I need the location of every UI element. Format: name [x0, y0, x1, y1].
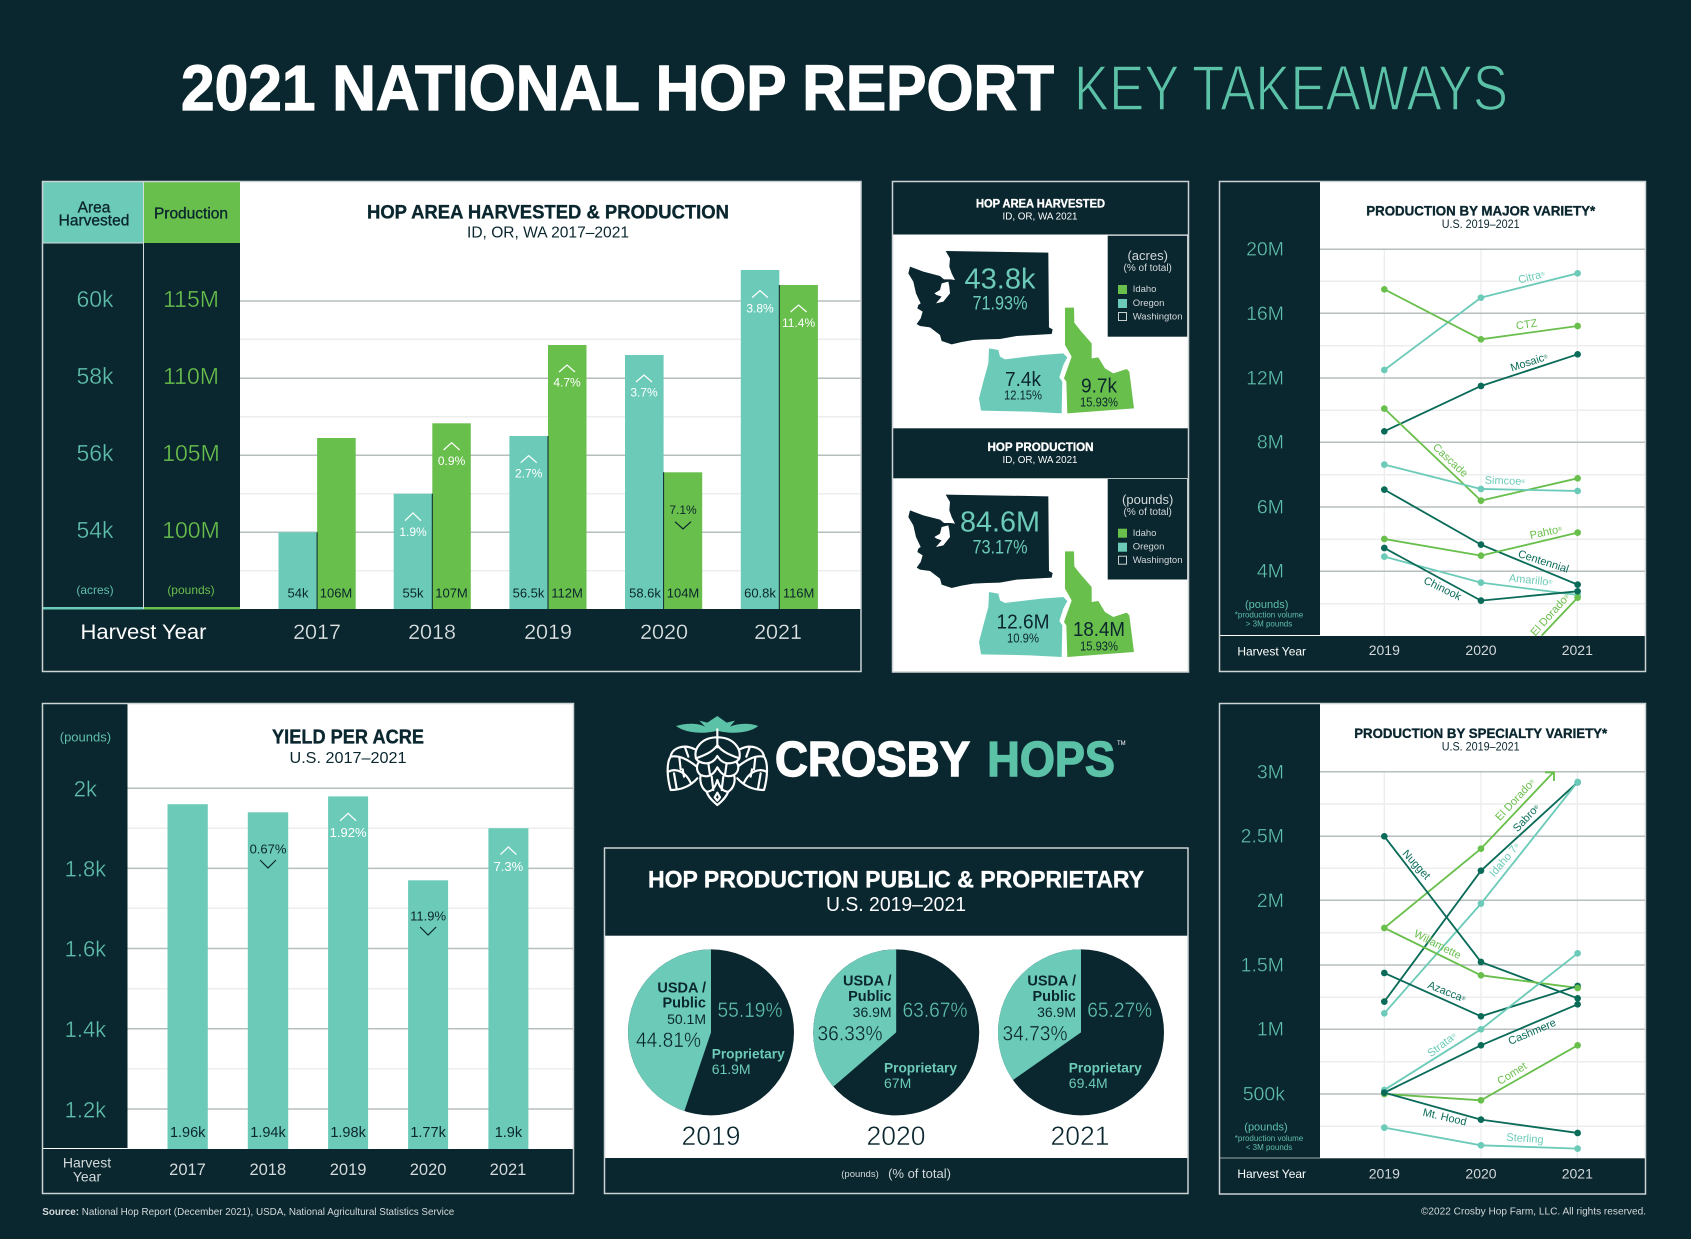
x axis	[1237, 1165, 1593, 1181]
acres axis: (acres)	[76, 583, 114, 597]
legend: acres: (acres)	[1127, 248, 1168, 263]
bar chart: yield: 1.92%	[330, 825, 367, 840]
bar chart: yield	[168, 796, 528, 1149]
values: pounds: 84.6M	[960, 507, 1040, 539]
x axis: 2019	[1369, 1165, 1400, 1181]
x axis: 2019	[330, 1161, 366, 1179]
bar chart: area and production: 54k	[288, 586, 309, 600]
y axis: 1.5M	[1241, 954, 1284, 976]
bar chart: area and production	[278, 270, 818, 609]
heading: hop production: HOP PRODUCTION	[988, 440, 1094, 454]
y axis	[1235, 761, 1304, 1152]
acres axis: 58k	[76, 363, 114, 389]
y axis: > 3M pounds	[1246, 620, 1292, 628]
bar chart: yield: 1.98k	[330, 1125, 367, 1141]
bar chart: yield: 11.9%	[410, 908, 446, 923]
x axis: harvest years: 2020	[640, 620, 688, 644]
pie: 2021: Proprietary	[1069, 1060, 1142, 1076]
line chart: major varieties: Chinook	[1422, 575, 1464, 603]
map: Oregon pounds	[979, 592, 1067, 657]
bar chart: yield: 0.67%	[250, 841, 287, 856]
values: pounds: 18.4M	[1073, 619, 1125, 641]
legend: pounds: Washington	[1133, 555, 1183, 566]
values: pounds: 10.9%	[1007, 630, 1039, 646]
heading: hop area harvested	[976, 197, 1105, 223]
acres axis: 56k	[76, 440, 114, 466]
x axis: Harvest	[63, 1154, 111, 1170]
bar chart: yield: 1.94k	[250, 1125, 286, 1141]
y axis: 1.6k	[65, 936, 107, 962]
title: 2021 NATIONAL HOP REPORT	[181, 52, 1054, 124]
pie: 2019: Proprietary	[712, 1045, 785, 1061]
column header: area harvested: Harvested	[59, 212, 129, 230]
y axis	[60, 730, 111, 1122]
panel: production by major variety	[1220, 181, 1646, 672]
y axis: 6M	[1257, 496, 1284, 518]
pounds axis: 115M	[163, 286, 219, 312]
pie: 2019	[628, 949, 794, 1151]
pie: 2021: 2021	[1051, 1121, 1109, 1151]
values: pounds: 12.6M	[996, 612, 1050, 634]
heading	[272, 727, 424, 767]
title	[181, 52, 1508, 124]
line chart: specialty varieties: Sterling	[1506, 1132, 1544, 1146]
values: acres: 71.93%	[972, 294, 1028, 314]
values: acres: 43.8k	[964, 263, 1036, 295]
bar chart: area and production: 112M	[551, 586, 583, 600]
bar chart: area and production: 60.8k	[744, 586, 776, 600]
line chart: specialty varieties: Comet	[1495, 1060, 1529, 1088]
heading: U.S. 2019–2021	[1442, 741, 1520, 753]
column header: area harvested: Area	[78, 200, 111, 216]
map: Washington pounds	[908, 495, 1053, 588]
bar chart: area and production: 3.8%	[746, 302, 774, 316]
pie: 2019: USDA /	[657, 980, 706, 996]
column header: production: Production	[154, 206, 228, 222]
legend: acres: Washington	[1133, 312, 1183, 322]
x axis: harvest years: 2017	[293, 620, 341, 644]
copyright note: ©2022 Crosby Hop Farm, LLC. All rights reserved.	[1421, 1206, 1646, 1218]
line chart: specialty varieties: Cashmere	[1507, 1017, 1558, 1048]
panel: production by specialty variety	[1220, 704, 1646, 1194]
logo: Crosby Hops	[668, 716, 1126, 805]
pie: 2020: 36.33%	[818, 1022, 882, 1046]
source note: Source: National Hop Report (December 2021), USDA, National Agricultural Statistics Service	[42, 1206, 454, 1218]
legend: acres: Oregon	[1133, 298, 1164, 309]
bar chart: yield: 1.96k	[170, 1125, 206, 1141]
values: acres: 15.93%	[1080, 394, 1118, 410]
bar chart: area and production: 4.7%	[553, 376, 581, 390]
x axis: harvest years	[80, 620, 802, 644]
pie: 2020: Proprietary	[884, 1060, 957, 1076]
bar chart: area and production: 116M	[783, 586, 814, 600]
line chart: specialty varieties: Strata®	[1425, 1030, 1459, 1060]
heading: PRODUCTION BY MAJOR VARIETY*	[1366, 203, 1596, 219]
y axis: 1.2k	[65, 1098, 107, 1122]
heading	[1366, 203, 1596, 231]
pie: 2021: USDA /	[1027, 973, 1076, 989]
values: pounds	[960, 507, 1125, 654]
heading: hop production	[988, 440, 1094, 466]
pie: 2019: 2019	[682, 1121, 740, 1151]
pie: 2020: 63.67%	[902, 999, 968, 1022]
logo: Crosby Hops: TM	[1117, 741, 1126, 747]
y axis: *production volume	[1235, 610, 1304, 620]
legend: pounds: Idaho	[1133, 528, 1156, 539]
line chart: major varieties: El Dorado®	[1529, 591, 1573, 639]
icon: hop cone	[668, 716, 767, 805]
panel: yield per acre	[42, 704, 574, 1194]
acres axis	[76, 286, 114, 597]
map: Idaho pounds	[1064, 551, 1134, 657]
line chart: specialty varieties: El Dorado®	[1493, 777, 1538, 823]
bar chart: area and production: 11.4%	[782, 316, 815, 330]
y axis: 16M	[1246, 303, 1284, 325]
panel: hop area harvested and production	[42, 181, 861, 672]
pie footer units: (pounds)	[841, 1169, 879, 1180]
line chart: major varieties: Amarillo®	[1508, 572, 1553, 589]
pie: 2021: 34.73%	[1002, 1022, 1068, 1046]
pie: 2019: Public	[662, 996, 706, 1012]
y axis: < 3M pounds	[1246, 1143, 1292, 1152]
heading: U.S. 2019–2021	[1442, 219, 1520, 231]
values: pounds: 15.93%	[1080, 638, 1118, 654]
x axis: harvest years: 2021	[754, 620, 802, 644]
heading: U.S. 2017–2021	[290, 750, 407, 767]
y axis	[1235, 238, 1304, 629]
legend: acres: (% of total)	[1124, 263, 1172, 274]
pie: 2020: 36.9M	[853, 1004, 892, 1020]
x axis: harvest years: 2019	[524, 620, 572, 644]
map: Idaho acres	[1064, 308, 1134, 413]
line chart: specialty varieties	[1381, 772, 1581, 1152]
pie: 2021: 65.27%	[1087, 999, 1152, 1022]
heading: YIELD PER ACRE	[272, 727, 424, 749]
pie: 2020	[813, 949, 979, 1151]
line chart: specialty varieties: Azacca®	[1426, 979, 1467, 1005]
legend: acres: Idaho	[1133, 284, 1156, 295]
heading: hop area harvested: HOP AREA HARVESTED	[976, 197, 1105, 211]
bar chart: yield: 1.9k	[495, 1125, 523, 1141]
y axis: (pounds)	[60, 730, 111, 744]
bar chart: area and production: 56.5k	[513, 586, 545, 600]
pie footer units	[841, 1166, 951, 1181]
pie: 2021: 36.9M	[1037, 1004, 1076, 1020]
line chart: specialty varieties: Idaho 7®	[1487, 841, 1523, 879]
heading: hop production: ID, OR, WA 2021	[1002, 454, 1078, 466]
heading: hop area harvested: ID, OR, WA 2021	[1002, 211, 1078, 223]
acres axis: 54k	[76, 517, 114, 543]
pounds axis: 105M	[162, 440, 220, 466]
x axis	[1237, 642, 1593, 659]
line chart: major varieties: Simcoe®	[1484, 475, 1526, 488]
x axis: harvest years: 2018	[408, 620, 456, 644]
x axis: 2021	[490, 1161, 526, 1179]
column header: area harvested	[59, 200, 129, 230]
pounds axis: 110M	[163, 363, 219, 389]
x axis: 2019	[1369, 642, 1400, 658]
panel: public and proprietary production	[604, 848, 1188, 1194]
logo: Crosby Hops: HOPS	[987, 733, 1115, 787]
legend: pounds: (pounds)	[1122, 492, 1173, 507]
pie: 2019: 61.9M	[712, 1061, 751, 1077]
y axis: 1M	[1257, 1019, 1284, 1041]
pie: 2020: USDA /	[843, 973, 892, 989]
x axis: 2020	[410, 1161, 446, 1179]
values: pounds: 73.17%	[972, 538, 1028, 558]
y axis: (pounds)	[1245, 599, 1288, 611]
y axis: *production volume	[1235, 1134, 1304, 1143]
pie footer units: (% of total)	[888, 1166, 951, 1181]
y axis: 4M	[1257, 561, 1284, 583]
bar chart: area and production: 58.6k	[629, 586, 661, 600]
bar chart: area and production: 7.1%	[669, 503, 697, 517]
x axis	[63, 1154, 526, 1184]
pie: 2019: 50.1M	[667, 1011, 706, 1027]
heading	[648, 866, 1144, 916]
x axis: Harvest Year	[1237, 645, 1306, 659]
line chart: major varieties	[1381, 268, 1581, 639]
pie: 2020: 67M	[884, 1075, 911, 1091]
title: KEY TAKEAWAYS	[1074, 52, 1508, 124]
legend: acres	[1108, 236, 1187, 337]
values: acres	[964, 263, 1118, 410]
bar chart: area and production: 104M	[667, 586, 699, 600]
map: Oregon acres	[979, 348, 1067, 413]
pounds axis	[162, 286, 220, 597]
chart heading: ID, OR, WA 2017–2021	[467, 224, 629, 242]
pie: 2021: 69.4M	[1069, 1075, 1108, 1091]
x axis: 2021	[1562, 1165, 1593, 1181]
pie: 2019: 55.19%	[718, 999, 782, 1022]
bar chart: area and production: 0.9%	[438, 454, 466, 468]
line chart: major varieties: Centennial	[1516, 548, 1570, 576]
y axis: 3M	[1257, 761, 1284, 783]
pie: 2020: 2020	[867, 1121, 925, 1151]
pounds axis: (pounds)	[167, 583, 215, 597]
line chart: major varieties: Mosaic®	[1509, 351, 1550, 374]
heading: U.S. 2019–2021	[826, 894, 966, 916]
values: acres: 9.7k	[1081, 376, 1118, 398]
logo: Crosby Hops: CROSBY	[775, 733, 970, 787]
line chart: major varieties: Citra®	[1517, 268, 1546, 286]
pie: 2021	[998, 949, 1164, 1151]
y axis: (pounds)	[1244, 1122, 1288, 1134]
x axis: Harvest Year	[1237, 1167, 1306, 1181]
y axis: 2k	[74, 776, 98, 802]
chart heading: HOP AREA HARVESTED & PRODUCTION	[367, 202, 729, 224]
line chart: specialty varieties: Sabro®	[1511, 802, 1542, 835]
x axis: 2020	[1465, 1165, 1497, 1181]
legend: pounds: (% of total)	[1124, 507, 1172, 518]
bar chart: yield: 1.77k	[410, 1125, 447, 1141]
line chart: specialty varieties: Willamette	[1412, 928, 1463, 962]
pounds axis: 100M	[162, 517, 220, 543]
y axis: 500k	[1243, 1083, 1285, 1105]
legend: pounds: Oregon	[1133, 542, 1164, 553]
x axis: 2020	[1465, 642, 1497, 658]
acres axis: 60k	[76, 286, 114, 312]
line chart: specialty varieties: Nugget	[1400, 848, 1432, 882]
y axis: 1.4k	[65, 1017, 107, 1042]
y axis: 2.5M	[1241, 826, 1284, 848]
map: Washington acres	[908, 251, 1053, 344]
y axis: 2M	[1257, 890, 1284, 912]
y axis: 1.8k	[65, 856, 107, 882]
x axis: Year	[73, 1168, 101, 1184]
x axis: 2018	[249, 1161, 286, 1179]
heading: PRODUCTION BY SPECIALTY VARIETY*	[1354, 725, 1608, 741]
bar chart: area and production: 106M	[320, 586, 352, 600]
heading	[1354, 725, 1608, 753]
bar chart: area and production: 55k	[403, 586, 424, 600]
panel: state maps	[892, 181, 1188, 672]
x axis: 2017	[169, 1161, 206, 1179]
legend: pounds	[1108, 479, 1187, 580]
y axis: 20M	[1246, 238, 1284, 260]
heading: HOP PRODUCTION PUBLIC & PROPRIETARY	[648, 866, 1144, 894]
line chart: major varieties: Cascade	[1430, 441, 1470, 480]
line chart: specialty varieties: Mt. Hood	[1422, 1107, 1468, 1128]
pie: 2019: 44.81%	[636, 1029, 701, 1052]
pie: 2020: Public	[848, 989, 892, 1005]
values: acres: 12.15%	[1004, 388, 1042, 402]
y axis: 8M	[1257, 432, 1284, 454]
line chart: major varieties: Pahto®	[1529, 523, 1563, 542]
bar chart: area and production: 107M	[435, 586, 468, 600]
line chart: major varieties: CTZ	[1515, 318, 1538, 332]
bar chart: area and production: 2.7%	[515, 467, 543, 481]
x axis: 2021	[1562, 642, 1593, 658]
y axis: 12M	[1246, 367, 1284, 389]
pie: 2021: Public	[1032, 989, 1076, 1005]
x axis: harvest years: Harvest Year	[80, 620, 206, 644]
chart heading	[367, 202, 729, 242]
bar chart: area and production: 1.9%	[399, 525, 427, 539]
bar chart: area and production: 3.7%	[630, 386, 658, 400]
bar chart: yield: 7.3%	[494, 859, 524, 874]
values: acres: 7.4k	[1005, 369, 1042, 391]
